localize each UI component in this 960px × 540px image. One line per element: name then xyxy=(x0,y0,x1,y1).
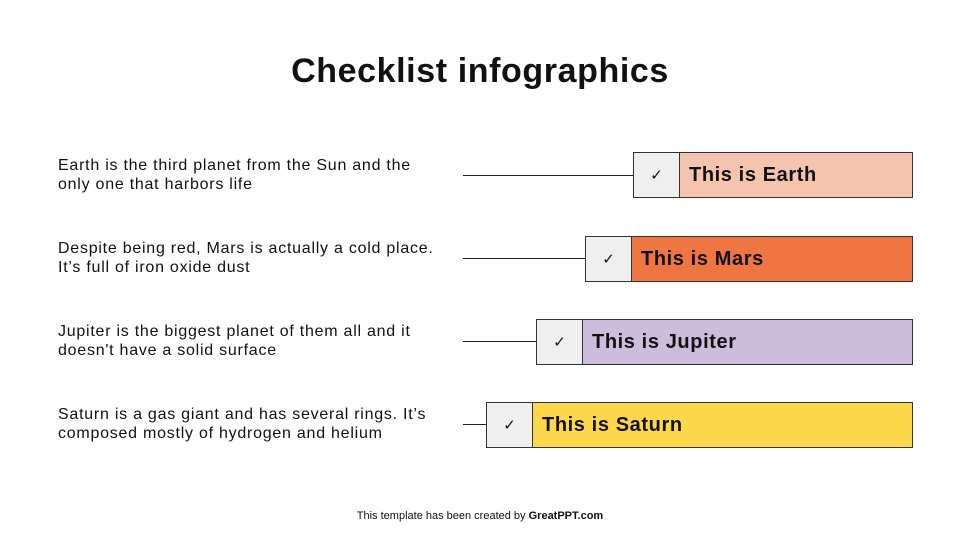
box: mars: ✓ xyxy=(602,251,615,268)
box: jupiter xyxy=(536,319,913,365)
text: mars xyxy=(58,240,434,276)
text: jupiter xyxy=(58,323,411,359)
connector: jupiter xyxy=(463,341,537,342)
text: saturn: composed mostly of hydrogen and helium xyxy=(58,425,383,442)
text: mars: Despite being red, Mars is actually a cold place. xyxy=(58,240,434,257)
box: jupiter: This is Jupiter xyxy=(592,330,737,352)
text: earth xyxy=(58,157,411,193)
connector: saturn xyxy=(463,424,487,425)
box: saturn xyxy=(486,402,913,448)
box: earth xyxy=(633,152,913,198)
box: saturn: This is Saturn xyxy=(542,414,683,436)
box: mars xyxy=(585,236,913,282)
box: saturn: ✓ xyxy=(503,417,516,434)
text: earth: Earth is the third planet from the Sun and the xyxy=(58,157,411,174)
box: earth: This is Earth xyxy=(689,164,817,186)
text: saturn: Saturn is a gas giant and has several rings. It’s xyxy=(58,406,426,423)
title: Checklist infographics xyxy=(291,52,669,90)
connector: mars xyxy=(463,258,586,259)
text: jupiter: Jupiter is the biggest planet of them all and it xyxy=(58,323,411,340)
box: mars: This is Mars xyxy=(641,248,764,270)
text: mars: It’s full of iron oxide dust xyxy=(58,259,250,276)
text: earth: only one that harbors life xyxy=(58,176,253,193)
box: jupiter: ✓ xyxy=(553,334,566,351)
text: jupiter: doesn't have a solid surface xyxy=(58,342,277,359)
footer: This template has been created by GreatPPT.com xyxy=(357,510,603,522)
text: saturn xyxy=(58,406,426,442)
box: earth: ✓ xyxy=(650,167,663,184)
connector: earth xyxy=(463,175,634,176)
